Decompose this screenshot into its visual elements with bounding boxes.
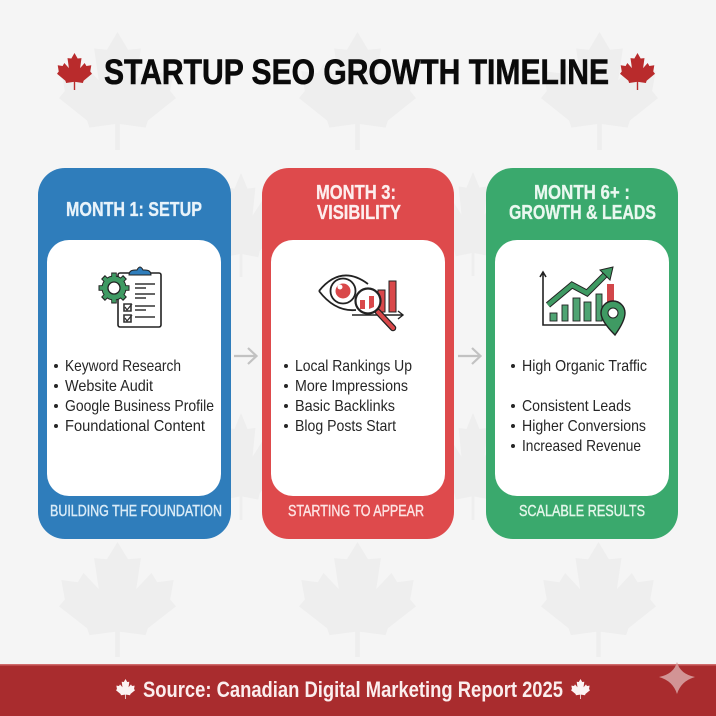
icon: sparkle: [659, 662, 695, 694]
title: STARTUP SEO GROWTH TIMELINE: [104, 53, 609, 92]
list: month 6+ outcomes: Increased Revenue: [522, 438, 641, 455]
heading: month 1: MONTH 1: SETUP: [66, 199, 202, 221]
heading: month 3: [316, 182, 402, 224]
heading: month 3: VISIBILITY: [317, 202, 402, 224]
list: month 3 results: Local Rankings Up: [295, 358, 412, 375]
heading: month 3: MONTH 3:: [316, 182, 396, 204]
list: month 3 results: Blog Posts Start: [295, 418, 396, 435]
icon: eye, magnifier and bars: [319, 275, 403, 328]
list: month 3 results: More Impressions: [295, 378, 408, 395]
inner card: month 1: [47, 240, 221, 496]
panel: month 6+ growth and leads: [486, 168, 678, 539]
arrow: month 3 to month 6: [458, 348, 480, 364]
panel: month 1 setup: [38, 168, 231, 539]
heading: month 6+: MONTH 6+ :: [534, 182, 630, 204]
icon: right title maple leaf: [620, 53, 655, 90]
heading: month 6+: GROWTH & LEADS: [509, 202, 656, 224]
heading: month 6+: [509, 182, 656, 224]
icon: growth chart and location pin: [540, 267, 625, 335]
list: month 6+ outcomes: High Organic Traffic: [522, 358, 647, 375]
icon: right footer maple leaf: [571, 679, 590, 699]
list: month 1 tasks: Keyword Research: [65, 358, 181, 375]
list: month 6+ outcomes: Consistent Leads: [522, 398, 631, 415]
icon: clipboard and gear: [98, 267, 161, 327]
icon: left footer maple leaf: [116, 679, 135, 699]
caption: month 3: STARTING TO APPEAR: [288, 503, 424, 520]
footer source text: Source: Canadian Digital Marketing Report 2025: [143, 677, 563, 702]
list: month 6+ outcomes: Higher Conversions: [522, 418, 646, 435]
icon: left title maple leaf: [57, 53, 92, 90]
list: month 3 results: [284, 358, 412, 435]
list: month 1 tasks: [54, 358, 214, 435]
list: month 1 tasks: Website Audit: [65, 378, 153, 395]
background maple leaf pattern: [59, 32, 658, 657]
arrow: month 1 to month 3: [234, 348, 256, 364]
list: month 6+ outcomes: [511, 358, 647, 455]
list: month 1 tasks: Google Business Profile: [65, 398, 214, 415]
caption: month 1: BUILDING THE FOUNDATION: [50, 503, 222, 520]
panel: month 3 visibility: [262, 168, 454, 539]
caption: month 6+: SCALABLE RESULTS: [519, 503, 645, 520]
inner card: month 6+: [495, 240, 669, 496]
list: month 3 results: Basic Backlinks: [295, 398, 395, 415]
list: month 1 tasks: Foundational Content: [65, 418, 206, 435]
inner card: month 3: [271, 240, 445, 496]
footer banner: [0, 662, 716, 716]
